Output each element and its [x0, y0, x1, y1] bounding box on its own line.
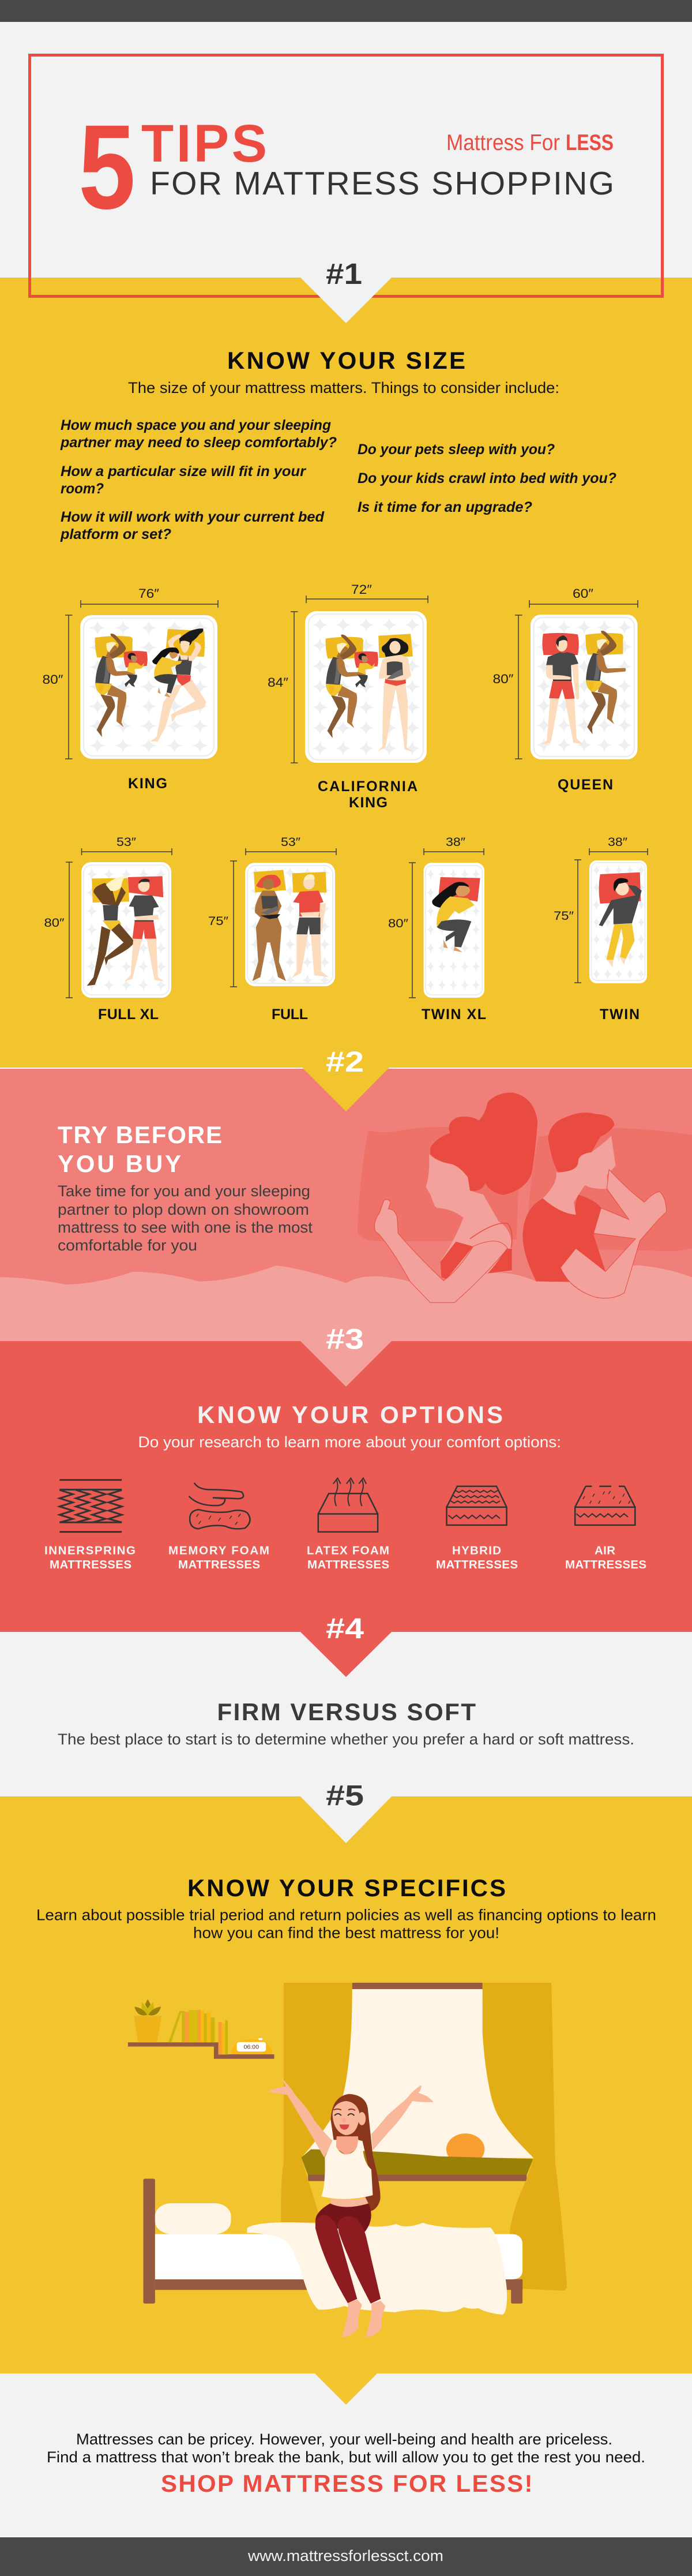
title: 5: [78, 100, 136, 234]
dimension labels: queen: 80″: [492, 672, 514, 686]
top bar: [0, 0, 692, 22]
marker #3: [300, 1323, 392, 1387]
label: twin xl: TWIN XL: [422, 1006, 486, 1023]
labels: mattress types: HYBRID: [452, 1544, 501, 1557]
label: queen: QUEEN: [558, 777, 613, 793]
closing text: Mattresses can be pricey. However, your well-being and health are priceless.: [76, 2431, 612, 2448]
dimension labels: california king: 72″: [351, 582, 372, 597]
questions: left column: partner may need to sleep comfortably?: [60, 435, 337, 451]
dimension labels: queen: 60″: [573, 586, 593, 601]
label: california king: KING: [349, 795, 388, 811]
dimensions: full xl: [66, 848, 172, 998]
yellow pointer: [315, 2373, 377, 2405]
questions: left column: How it will work with your current bed: [61, 509, 325, 525]
label: twin: TWIN: [600, 1006, 640, 1023]
mattress: queen: [531, 615, 638, 759]
panel: tip 1 know your size: [0, 55, 692, 1069]
labels: mattress types: MEMORY FOAM: [168, 1544, 269, 1557]
body text: comfortable for you: [58, 1237, 197, 1254]
questions: left column: platform or set?: [60, 526, 171, 542]
window: [301, 1983, 534, 2181]
dimension labels: twin: [554, 836, 628, 923]
questions: left column: How much space you and your sleeping: [61, 417, 331, 433]
dimension labels: king: 76″: [138, 586, 159, 601]
man arm: [561, 1170, 667, 1298]
label: california king: [318, 778, 418, 811]
title frame: [30, 55, 662, 297]
mattress: full xl: [81, 862, 171, 998]
dimension labels: king: [43, 586, 159, 687]
mattress: twin xl: [423, 863, 484, 998]
illustration: couple in bed: [0, 1092, 692, 1343]
panel: tip 5 know your specifics: [0, 1780, 692, 2373]
woman: [426, 1092, 537, 1279]
questions: right column: Do your pets sleep with you?: [358, 441, 555, 458]
panel: tip 4 firm versus soft: [0, 1612, 692, 1796]
marker #1: [300, 257, 392, 323]
label: king: KING: [128, 776, 167, 792]
dimensions: king: [65, 600, 218, 759]
closing text: [47, 2431, 645, 2466]
labels: mattress types: AIR: [595, 1544, 615, 1557]
marker #5: #5: [326, 1780, 364, 1812]
labels: mattress types: MATTRESSES: [178, 1558, 260, 1571]
body text: Take time for you and your sleeping: [58, 1182, 310, 1200]
dimension labels: california king: 84″: [268, 675, 288, 690]
marker #4: #4: [326, 1612, 364, 1645]
panel: tip 2 try before you buy: [0, 1046, 692, 1343]
dimension labels: full xl: 80″: [44, 916, 65, 930]
title: [78, 100, 614, 234]
heading: try before you buy: YOU BUY: [58, 1150, 181, 1177]
dimension labels: full: 53″: [281, 836, 301, 849]
labels: mattress types: MATTRESSES: [50, 1558, 131, 1571]
mattress: california king: [305, 611, 427, 763]
mattress: king: [80, 615, 217, 759]
marker #1: #1: [326, 257, 362, 290]
intro text: The size of your mattress matters. Things to consider include:: [128, 379, 559, 396]
curtains: [281, 1983, 567, 2290]
mattress: full: [245, 863, 335, 986]
blanket: [0, 1265, 692, 1343]
body text: Learn about possible trial period and return policies as well as financing options to learn: [36, 1907, 656, 1924]
heading: know your options: KNOW YOUR OPTIONS: [197, 1401, 503, 1428]
dimensions: queen: [515, 600, 638, 759]
dimension labels: twin xl: 38″: [446, 836, 466, 849]
icon: innerspring: [59, 1480, 122, 1532]
panel: closing message: [0, 2373, 692, 2537]
dimension labels: full xl: 53″: [116, 836, 137, 849]
body text: [58, 1182, 313, 1254]
heading: try before you buy: [58, 1121, 222, 1177]
mattress: twin: [589, 860, 647, 983]
dimensions: twin xl: [409, 848, 484, 998]
labels: mattress types: MATTRESSES: [307, 1558, 389, 1571]
body text: mattress to see with one is the most: [58, 1219, 313, 1236]
icon: memory foam: [189, 1483, 250, 1529]
dimension labels: twin: 75″: [554, 909, 574, 923]
dimensions: california king: [291, 596, 428, 763]
heading: try before you buy: TRY BEFORE: [58, 1121, 222, 1148]
marker #5: [300, 1780, 392, 1843]
questions: left column: [60, 417, 337, 542]
dimension labels: queen: [492, 586, 593, 686]
dimension labels: full: 75″: [208, 915, 229, 928]
bed: [143, 2179, 522, 2315]
questions: left column: How a particular size will fit in your: [61, 463, 306, 480]
intro text: Do your research to learn more about your comfort options:: [138, 1433, 561, 1451]
dimensions: twin: [574, 848, 648, 983]
marker #2: #2: [326, 1046, 364, 1078]
illustration: woman waking up in bedroom: [128, 1983, 567, 2337]
body text: The best place to start is to determine whether you prefer a hard or soft mattress.: [58, 1731, 634, 1748]
woman stretching: [267, 2079, 434, 2337]
questions: right column: [358, 441, 616, 515]
dimension labels: california king: [268, 582, 372, 690]
body text: partner to plop down on showroom: [58, 1201, 309, 1218]
dimension labels: full: [208, 836, 301, 928]
questions: right column: Do your kids crawl into bed with you?: [358, 470, 616, 486]
icon: latex foam: [318, 1478, 378, 1532]
labels: mattress types: MATTRESSES: [436, 1558, 518, 1571]
pillows: [358, 1127, 692, 1251]
questions: left column: room?: [61, 481, 104, 497]
shelf with plant, books and clock: [128, 1999, 274, 2059]
man: [522, 1113, 616, 1282]
heading: know your size: KNOW YOUR SIZE: [227, 347, 465, 374]
labels: mattress types: INNERSPRING: [44, 1544, 136, 1557]
label: full: FULL: [272, 1006, 308, 1023]
call to action: SHOP MATTRESS FOR LESS!: [161, 2470, 533, 2497]
body text: [36, 1907, 656, 1941]
questions: right column: Is it time for an upgrade?: [358, 499, 532, 515]
icon: air: [575, 1487, 635, 1525]
heading: know your specifics: KNOW YOUR SPECIFICS: [187, 1874, 506, 1901]
marker #2: [302, 1046, 389, 1111]
labels: mattress types: MATTRESSES: [565, 1558, 646, 1571]
dimension labels: twin xl: 80″: [388, 917, 409, 930]
marker #4: [300, 1612, 392, 1677]
dimension labels: twin xl: [388, 836, 466, 930]
labels: mattress types: [44, 1544, 646, 1571]
heading: firm versus soft: FIRM VERSUS SOFT: [217, 1698, 476, 1725]
label: california king: CALIFORNIA: [318, 778, 418, 795]
title: FOR MATTRESS SHOPPING: [150, 165, 614, 202]
title: TIPS: [141, 114, 267, 173]
shelf with plant, books and clock: 06:00: [243, 2045, 259, 2050]
closing text: Find a mattress that won’t break the bank, but will allow you to get the rest you need.: [47, 2448, 645, 2466]
label: full xl: FULL XL: [98, 1006, 159, 1023]
dimension labels: full xl: [44, 836, 137, 930]
logo: Mattress For Less: Mattress For: [446, 130, 560, 155]
dimension labels: king: 80″: [43, 672, 63, 687]
marker #3: #3: [326, 1323, 364, 1355]
icon: hybrid: [446, 1487, 507, 1525]
logo: Mattress For Less: LESS: [566, 130, 614, 155]
footer bar: [0, 2537, 692, 2576]
dimensions: full: [230, 848, 336, 987]
panel: tip 3 know your options: [0, 1323, 692, 1632]
woman arm: [375, 1200, 507, 1302]
dimension labels: twin: 38″: [608, 836, 628, 849]
body text: how you can find the best mattress for you!: [193, 1924, 499, 1941]
footer bar: www.mattressforlessct.com: [247, 2547, 443, 2564]
labels: mattress types: LATEX FOAM: [307, 1544, 389, 1557]
